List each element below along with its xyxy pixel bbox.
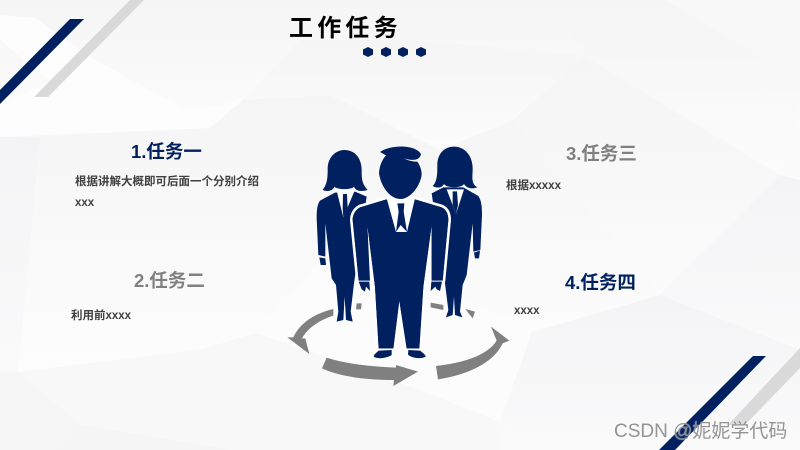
person: center man bbox=[353, 146, 448, 358]
task 4 description: xxxx bbox=[514, 305, 540, 317]
top-right region bbox=[555, 0, 800, 180]
task 1 description second line: xxx bbox=[75, 197, 94, 209]
circular arrows bbox=[287, 303, 509, 386]
top central region bbox=[243, 40, 584, 165]
task 3 description: 根据xxxxx bbox=[506, 180, 561, 192]
task 3 heading: 3.任务三 bbox=[566, 143, 637, 164]
person: left woman bbox=[317, 150, 368, 322]
left central region bbox=[18, 95, 660, 372]
task 2 heading: 2.任务二 bbox=[134, 270, 205, 291]
task 2 description: 利用前xxxx bbox=[71, 310, 131, 322]
task 4 heading: 4.任务四 bbox=[565, 272, 636, 293]
watermark: CSDN @妮妮学代码 bbox=[614, 421, 787, 442]
title: 工作任务 bbox=[289, 15, 402, 42]
person: right woman bbox=[432, 147, 482, 317]
top-left region bbox=[0, 0, 584, 137]
task 1 heading: 1.任务一 bbox=[131, 141, 202, 162]
right central region bbox=[513, 56, 780, 332]
bottom regions bbox=[18, 333, 800, 450]
task 1 description: 根据讲解大概即可后面一个分别介绍 bbox=[75, 176, 259, 188]
